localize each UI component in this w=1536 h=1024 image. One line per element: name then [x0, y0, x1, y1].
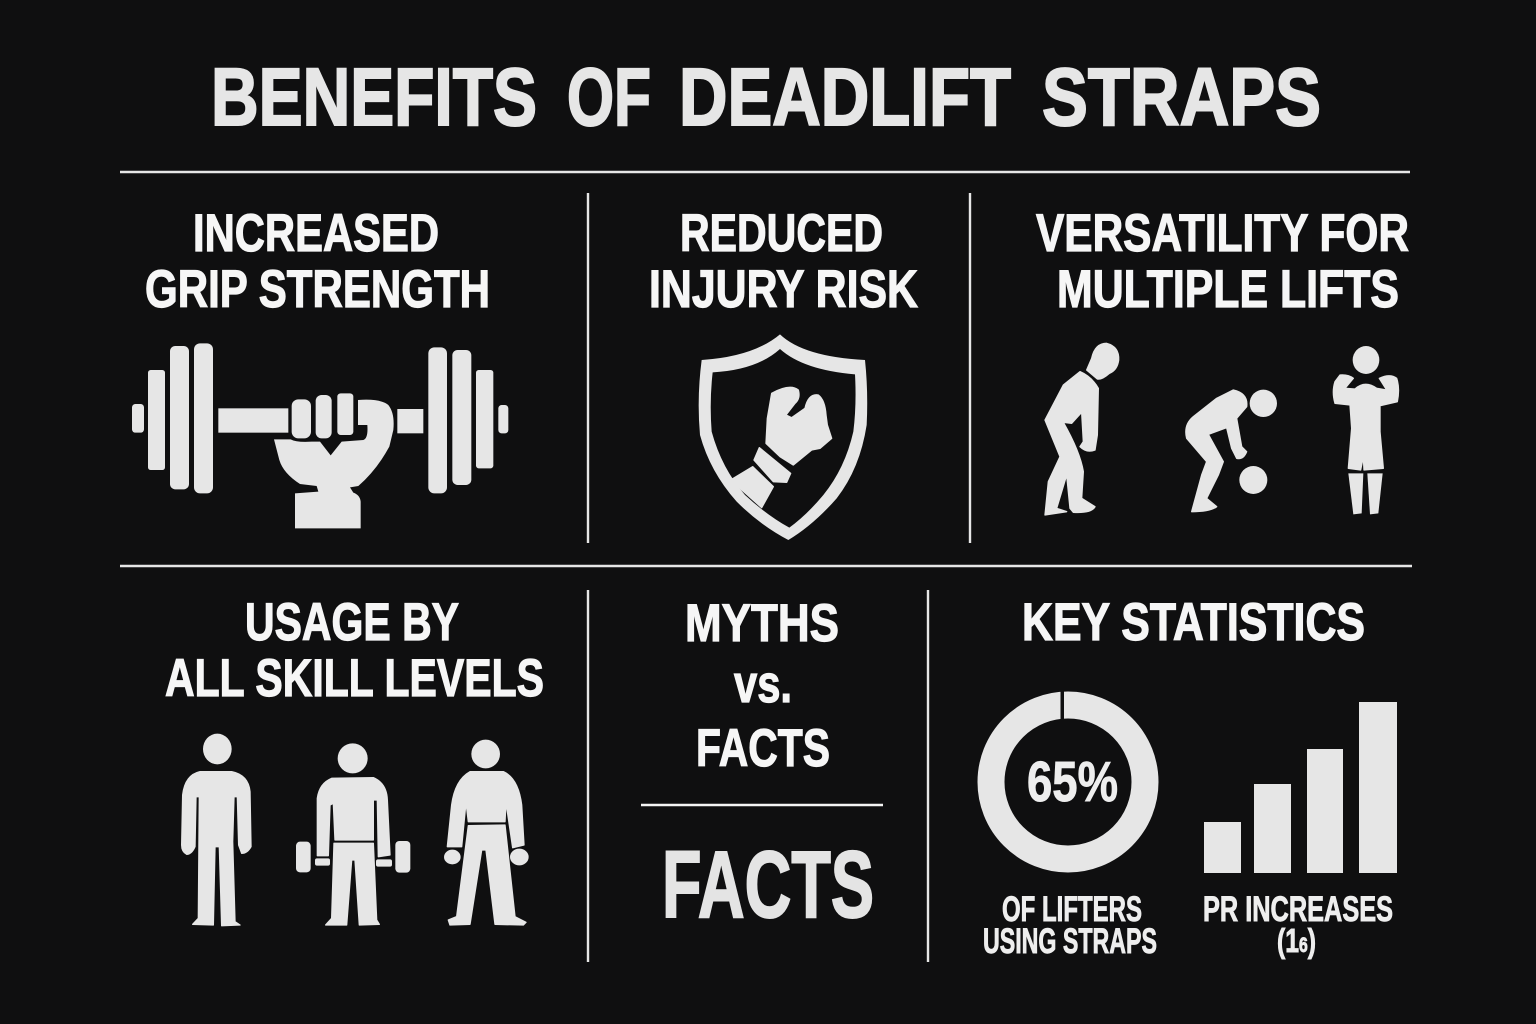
caption: of lifters using straps: USING STRAPS: [983, 922, 1157, 961]
heading: usage by all skill levels: USAGE BY: [245, 593, 459, 652]
icon: fist gripping barbell: [132, 343, 508, 528]
heading: usage by all skill levels: ALL SKILL LEVELS: [165, 649, 544, 708]
icon: three standing figures with weights: [182, 734, 529, 926]
heading: key statistics: KEY STATISTICS: [1022, 593, 1365, 652]
panel: key statistics: [983, 593, 1397, 961]
heading: reduced injury risk: REDUCED: [680, 204, 883, 263]
donut chart: 65%: 65%: [1027, 750, 1118, 814]
panel: versatility for multiple lifts: [1036, 204, 1409, 515]
icon: three lifting figures: [1045, 343, 1399, 515]
heading: myths vs. facts: [685, 594, 839, 778]
panel: myths vs facts: [641, 594, 883, 938]
heading: myths vs. facts: vs.: [734, 655, 792, 714]
heading: increased grip strength: GRIP STRENGTH: [145, 260, 490, 319]
title: STRAPS: [1042, 52, 1321, 143]
heading: myths vs. facts: FACTS: [696, 719, 830, 778]
panel: reduced injury risk: [649, 204, 918, 540]
large word: facts: FACTS: [662, 832, 874, 938]
bar chart: PR increases: [1204, 702, 1397, 873]
icon: shield with strapped fist: [699, 334, 867, 540]
caption: PR increases: PR INCREASES: [1203, 890, 1393, 929]
panel: usage by all skill levels: [165, 593, 544, 926]
title: OF: [567, 52, 651, 143]
title: DEADLIFT: [679, 52, 1011, 143]
heading: versatility for multiple lifts: [1036, 204, 1409, 319]
heading: versatility for multiple lifts: VERSATILITY FOR: [1036, 204, 1409, 263]
heading: usage by all skill levels: [165, 593, 544, 708]
caption: PR increases: (16): [1277, 922, 1316, 959]
heading: versatility for multiple lifts: MULTIPLE LIFTS: [1057, 260, 1399, 319]
title: [211, 52, 1321, 143]
title: BENEFITS: [211, 52, 537, 143]
donut chart: 65%: [991, 688, 1145, 859]
panel: increased grip strength: [132, 204, 508, 528]
heading: increased grip strength: INCREASED: [193, 204, 439, 263]
heading: myths vs. facts: MYTHS: [685, 594, 839, 653]
heading: reduced injury risk: INJURY RISK: [649, 260, 918, 319]
heading: increased grip strength: [145, 204, 490, 319]
caption: of lifters using straps: OF LIFTERS: [1002, 890, 1142, 929]
heading: reduced injury risk: [649, 204, 918, 319]
caption: PR increases: [1203, 890, 1393, 959]
caption: of lifters using straps: [983, 890, 1157, 961]
